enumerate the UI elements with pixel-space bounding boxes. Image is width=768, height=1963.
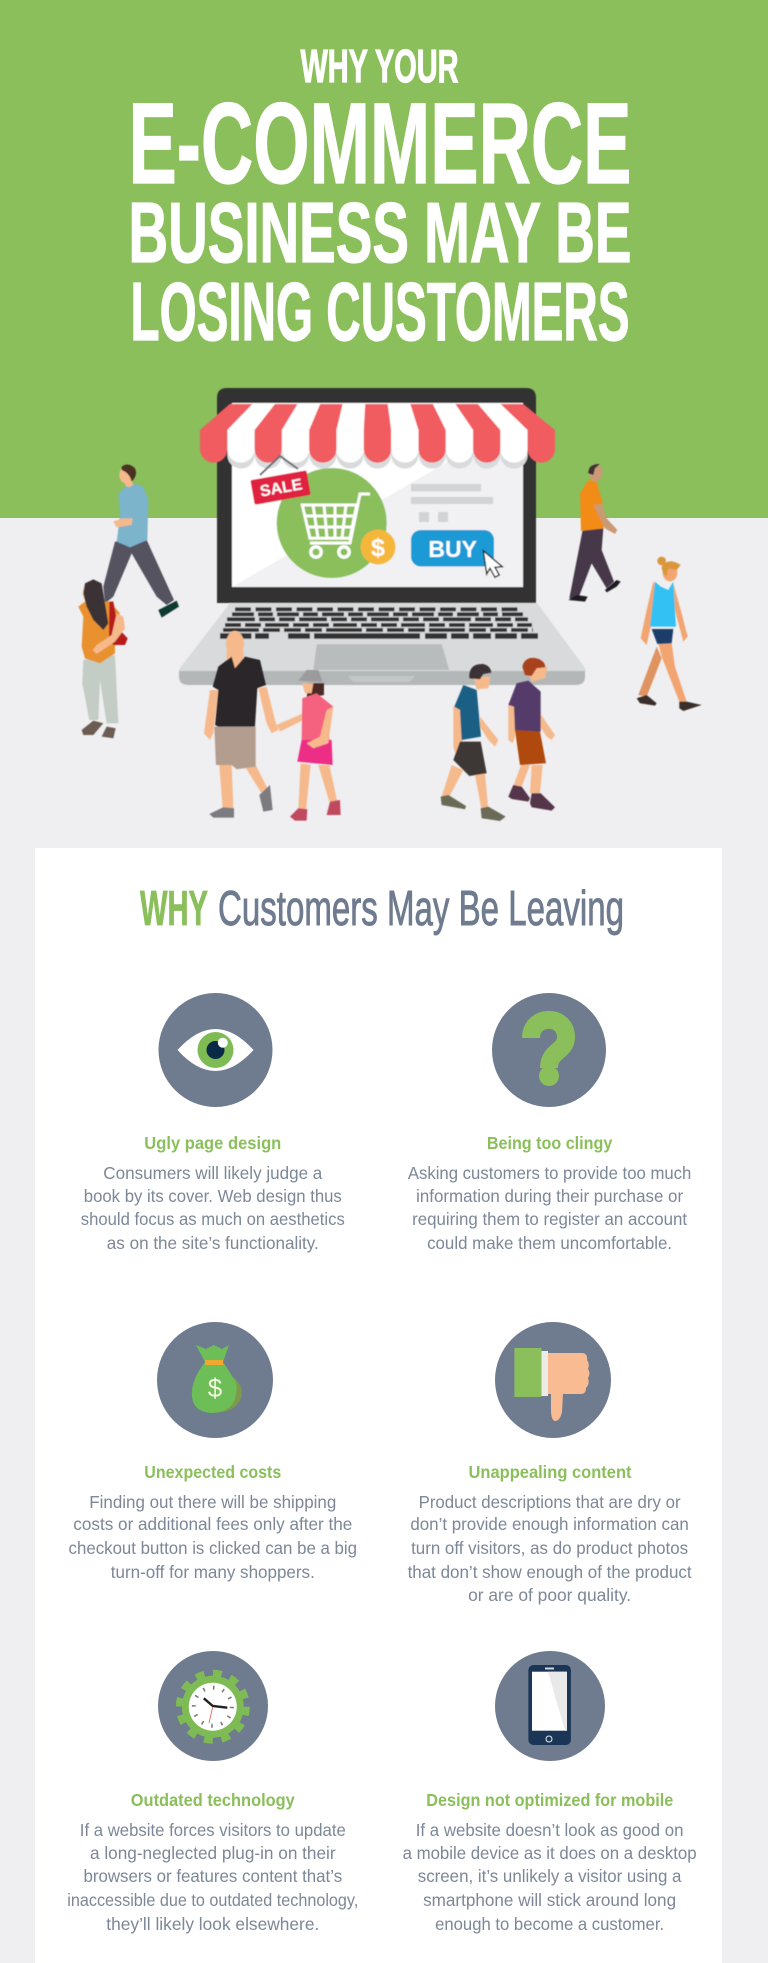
walking man in blue shirt [103, 465, 179, 618]
section heading: WHY [140, 882, 208, 936]
laptop storefront illustration [179, 388, 586, 685]
heading: Outdated technology [131, 1790, 295, 1810]
description: could make them uncomfortable. [427, 1233, 672, 1253]
description: information during their purchase or [416, 1186, 683, 1206]
description [403, 1820, 697, 1934]
buy button: BUY [428, 536, 477, 562]
description: Asking customers to provide too much [408, 1163, 691, 1183]
panel: why customers may be leaving [35, 848, 722, 1963]
description [408, 1492, 692, 1605]
description: Finding out there will be shipping [89, 1492, 336, 1512]
laptop base [179, 603, 586, 685]
dollar coin: $ [371, 534, 385, 562]
description: browsers or features content that’s [83, 1866, 342, 1886]
title: WHY YOUR [300, 40, 458, 92]
icon: eye [158, 993, 272, 1107]
description: as on the site’s functionality. [107, 1233, 319, 1253]
description: should focus as much on aesthetics [81, 1209, 345, 1229]
description: Product descriptions that are dry or [419, 1492, 681, 1512]
description: inaccessible due to outdated technology, [67, 1890, 358, 1910]
description: a mobile device as it does on a desktop [403, 1843, 697, 1863]
description: Consumers will likely judge a [103, 1163, 323, 1183]
description: or are of poor quality. [468, 1585, 631, 1605]
icon: smartphone [495, 1651, 605, 1761]
man in black shirt [204, 631, 278, 818]
cursor arrow [483, 551, 502, 577]
description: they’ll likely look elsewhere. [106, 1914, 319, 1934]
description: If a website doesn’t look as good on [416, 1820, 683, 1840]
description: turn off visitors, as do product photos [411, 1538, 688, 1558]
description: book by its cover. Web design thus [84, 1186, 342, 1206]
description [67, 1820, 358, 1934]
icon: gear clock [158, 1651, 268, 1761]
description: turn-off for many shoppers. [111, 1562, 315, 1582]
description: If a website forces visitors to update [80, 1820, 346, 1840]
description: a long-neglected plug-in on their [90, 1843, 336, 1863]
description: smartphone will stick around long [423, 1890, 676, 1910]
icon: thumbs down [495, 1322, 611, 1438]
description: requiring them to register an account [412, 1209, 687, 1229]
section heading [140, 882, 624, 936]
description [69, 1492, 357, 1582]
heading: Unexpected costs [144, 1462, 282, 1482]
buy button [411, 530, 494, 566]
green header band [0, 0, 768, 518]
item: ugly page design [81, 993, 345, 1253]
description [81, 1163, 345, 1253]
girl in pink [277, 670, 341, 821]
description: screen, it’s unlikely a visitor using a [418, 1866, 682, 1886]
sale sign: SALE [259, 476, 304, 501]
item: unappealing content [408, 1322, 692, 1605]
description: that don’t show enough of the product [408, 1562, 692, 1582]
awning [200, 404, 555, 463]
shopping cart circle [277, 468, 387, 578]
item: being too clingy [408, 993, 691, 1253]
icon: money bag [157, 1322, 273, 1438]
icon: question mark [492, 993, 606, 1107]
heading: Being too clingy [487, 1133, 613, 1153]
product placeholder bars [411, 484, 493, 522]
screen [232, 403, 523, 587]
laptop screen bezel [217, 388, 536, 603]
description: don’t provide enough information can [410, 1514, 689, 1534]
sale sign [250, 456, 311, 505]
description: costs or additional fees only after the [73, 1514, 352, 1534]
item: unexpected costs [69, 1322, 357, 1582]
description: checkout button is clicked can be a big [69, 1538, 357, 1558]
people: right group [441, 464, 702, 821]
woman in orange shirt [78, 579, 128, 738]
title [128, 40, 632, 358]
man in orange shirt [568, 464, 621, 602]
heading: Design not optimized for mobile [426, 1790, 674, 1810]
dollar coin [360, 530, 396, 564]
boy in blue shirt [441, 664, 506, 821]
item: outdated technology [67, 1651, 358, 1934]
item: design not optimized for mobile [403, 1651, 697, 1934]
icon: money bag: $ [208, 1373, 223, 1403]
heading: Ugly page design [144, 1133, 281, 1153]
keyboard [220, 609, 538, 636]
description: enough to become a customer. [435, 1914, 664, 1934]
heading: Unappealing content [468, 1462, 632, 1482]
awning shadow [227, 441, 528, 469]
woman in blue top [637, 557, 702, 711]
boy in purple shirt [508, 658, 555, 811]
description [408, 1163, 691, 1253]
people: left group [78, 465, 341, 821]
